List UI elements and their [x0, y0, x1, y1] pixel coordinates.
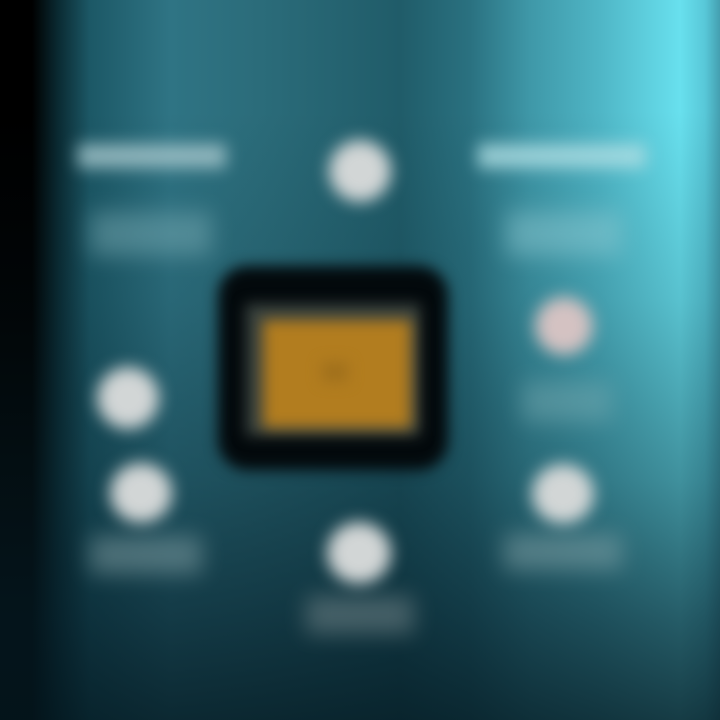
- label left lower: [90, 536, 202, 574]
- icon right lower: [532, 464, 594, 524]
- label right upper: [522, 382, 612, 422]
- central panel inner frame: [246, 304, 420, 436]
- icon left lower: [110, 463, 172, 523]
- icon top center: [329, 140, 391, 202]
- heading left: [78, 144, 226, 168]
- text block right: [506, 212, 622, 256]
- icon right upper: [535, 297, 593, 355]
- central gold square: [263, 320, 411, 428]
- central panel: [218, 266, 448, 470]
- heading right: [478, 144, 646, 168]
- label bottom center: [306, 596, 414, 634]
- icon left upper: [97, 367, 159, 429]
- text block left: [90, 212, 212, 256]
- label right lower: [504, 534, 622, 570]
- central gold highlight: [322, 362, 348, 382]
- icon bottom center: [327, 522, 391, 584]
